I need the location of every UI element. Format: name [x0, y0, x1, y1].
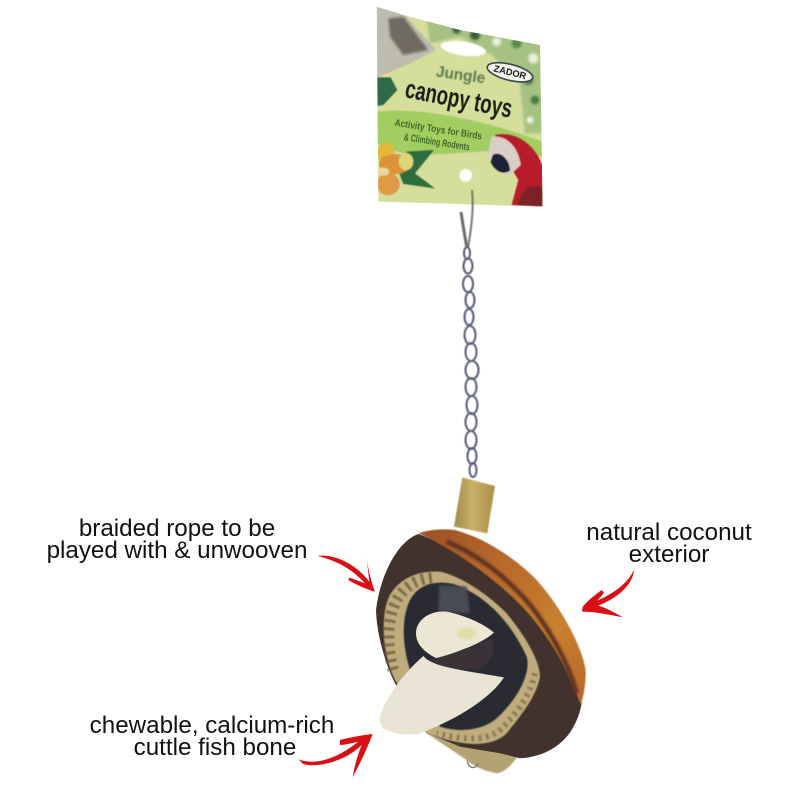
hang hole: [459, 169, 472, 182]
coconut shell orange rim: [418, 529, 586, 705]
label: natural coconut exterior: exterior: [629, 541, 709, 568]
rope texture lower: [437, 673, 535, 739]
hang tag card: [377, 7, 543, 207]
card background: [377, 7, 543, 207]
rope texture: [389, 577, 437, 670]
rope tassel bottom: [427, 733, 520, 773]
label: braided rope: played with & unwooven: [47, 537, 307, 564]
inner dark fill: [404, 583, 528, 730]
tassel ring: [467, 761, 478, 767]
label: natural coconut exterior: natural coconut: [586, 519, 752, 546]
middle coil band: [428, 638, 493, 669]
label: cuttle fish bone: cuttle fish bone: [134, 734, 296, 761]
top slot hole: [440, 40, 486, 57]
flowers: [377, 143, 435, 195]
parrot: [488, 134, 543, 207]
label: braided rope: [47, 515, 307, 564]
arrow: braided rope: [317, 552, 375, 592]
tag subtitle: Activity Toys for Birds: [394, 118, 483, 143]
product name: canopy toys: [403, 73, 515, 123]
center rope strand: [438, 585, 470, 613]
hanging chain: [461, 190, 478, 477]
small bone: [416, 611, 494, 659]
coconut shell inner dark: [376, 534, 582, 758]
label: cuttle fish bone: chewable, calcium-rich: [90, 712, 334, 739]
rope coil: [384, 571, 540, 744]
green banner: [377, 111, 543, 157]
arrow: cuttle fish bone: [298, 734, 373, 777]
label: natural coconut exterior: [586, 519, 752, 568]
shell rim shade: [447, 542, 577, 693]
large bone: [379, 656, 504, 734]
brand badge: ZADOR: [493, 63, 528, 81]
brand badge: [485, 59, 535, 86]
tag subtitle: & Climbing Rodents: [403, 132, 471, 154]
wooden bead: [454, 477, 495, 533]
label: braided rope: braided rope to be: [79, 515, 275, 542]
bone highlight: [457, 627, 476, 639]
foliage top band: [427, 18, 543, 133]
jungle logo: Jungle: [435, 64, 486, 87]
animal photo: [377, 7, 436, 77]
label: cuttle fish bone: [90, 712, 334, 761]
arrow: coconut exterior: [582, 569, 634, 617]
coconut toy: [376, 477, 586, 773]
leaf left: [377, 77, 397, 106]
tag subtitle: [394, 118, 483, 154]
